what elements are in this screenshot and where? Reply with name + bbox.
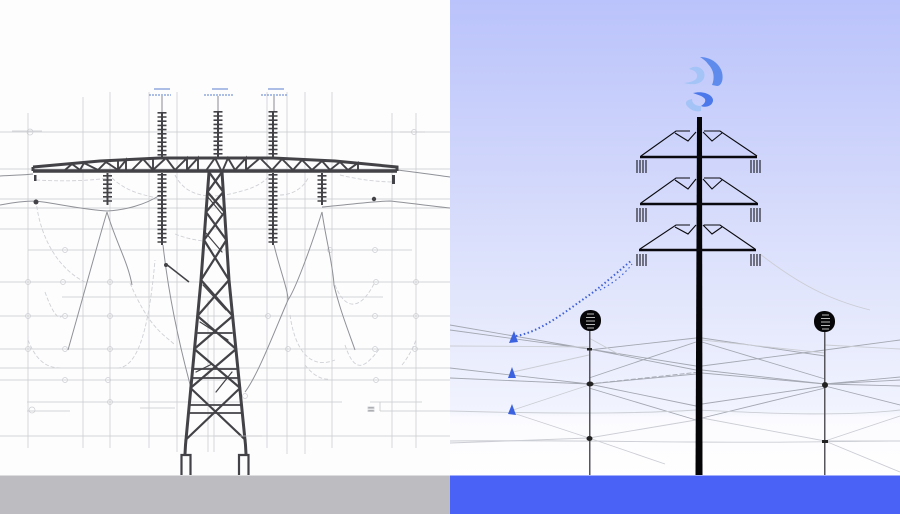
dotted signal path: [516, 260, 632, 336]
ground: grey: [0, 476, 450, 514]
side insulators: [108, 173, 322, 205]
faint wires: [450, 254, 900, 472]
crossarms: [639, 131, 758, 250]
cross bracing: [186, 172, 246, 440]
top lead lines: [162, 96, 274, 112]
fittings: [34, 175, 395, 282]
lower long insulators: [162, 173, 273, 245]
main pole: [696, 117, 702, 475]
faint sagging conductors: [28, 175, 416, 379]
tower body: [185, 172, 246, 454]
blueprint grid: [0, 92, 450, 454]
main conductors: [0, 170, 450, 392]
top insulators: [162, 111, 273, 157]
insulator strings: [108, 111, 322, 245]
grid node markers: [26, 129, 418, 413]
ground: blue: [450, 476, 900, 514]
small annotation marks: [12, 131, 425, 436]
blue tick marks: [149, 89, 287, 95]
tower feet: [182, 455, 248, 475]
panel: lattice tower blueprint: [0, 0, 450, 514]
legs: [185, 172, 246, 454]
upper crossarm: [640, 131, 757, 157]
horizontal struts: [190, 333, 241, 413]
middle crossarm: [640, 178, 758, 204]
hanging insulators: [637, 160, 760, 266]
lower crossarm: [639, 225, 756, 250]
secondary pole: left: [580, 310, 601, 475]
icon: signal arcs: [684, 57, 723, 111]
crossarm truss: [33, 158, 397, 172]
panel: distribution pole: [450, 0, 900, 514]
blue markers: [508, 331, 518, 415]
overhead wires: [450, 325, 900, 420]
secondary pole: right: [814, 311, 835, 475]
